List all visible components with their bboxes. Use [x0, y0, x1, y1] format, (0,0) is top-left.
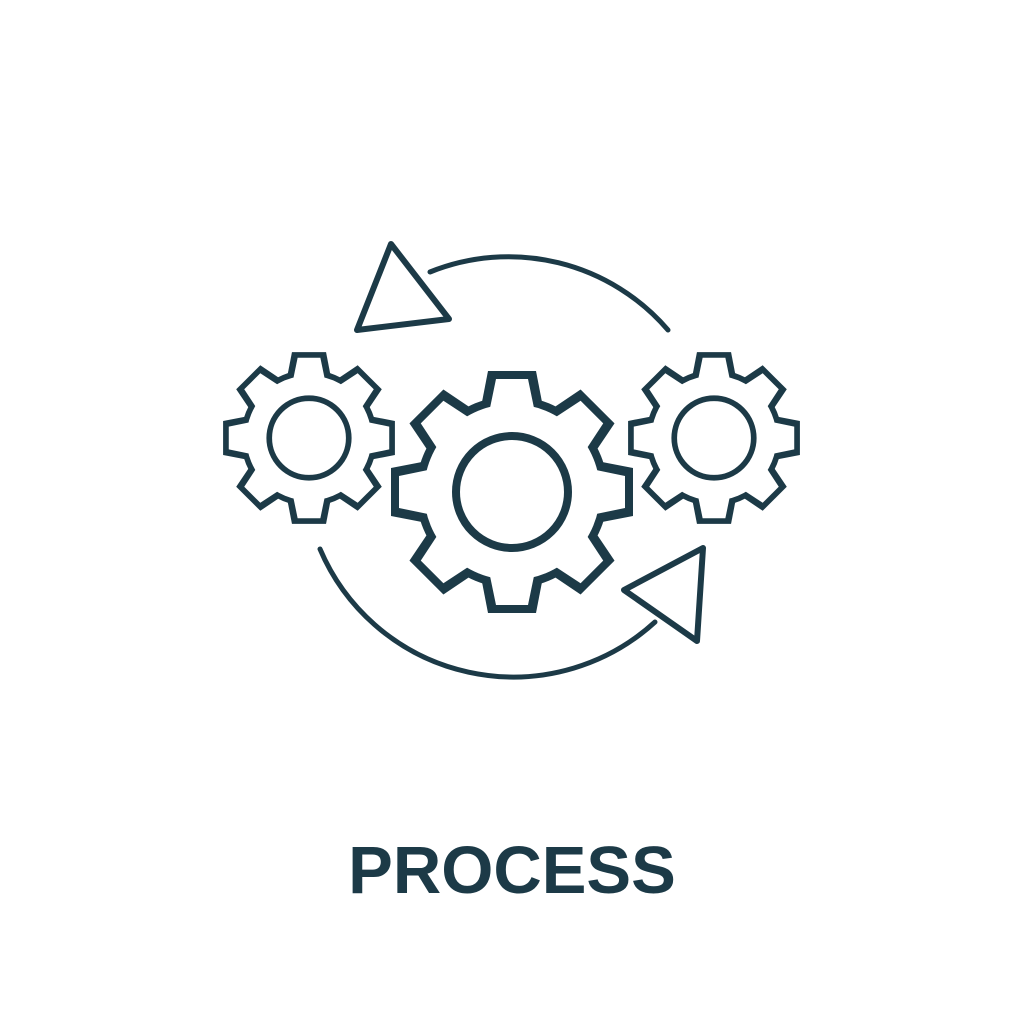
- arrow: top cycle arc with triangle head: [357, 244, 668, 330]
- title: PROCESS: [348, 833, 676, 908]
- arrow: bottom cycle arc with triangle head: [320, 548, 703, 677]
- icon: center gear: [391, 371, 633, 613]
- icon: right gear: [628, 352, 800, 524]
- icon: left gear: [223, 352, 395, 524]
